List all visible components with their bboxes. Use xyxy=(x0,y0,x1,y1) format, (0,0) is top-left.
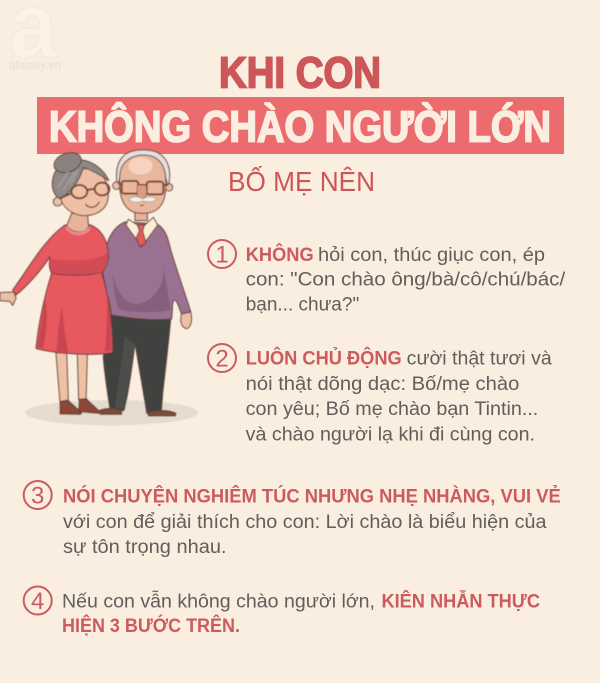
number 1 badge xyxy=(208,240,236,268)
item 2 text xyxy=(246,348,552,446)
item 4 text: KIÊN NHẪN THỰC xyxy=(382,590,540,612)
number 1 badge: 1 xyxy=(215,242,229,268)
number 2 badge: 2 xyxy=(215,346,229,372)
item 3 text: NÓI CHUYỆN NGHIÊM TÚC NHƯNG NHẸ NHÀNG, VUI VẺ xyxy=(63,486,561,508)
title: khi con: KHI CON xyxy=(219,48,381,98)
item 2 text: nói thật dõng dạc: Bố/mẹ chào xyxy=(246,374,519,395)
number 2 badge xyxy=(208,344,236,372)
item 1 text: bạn... chưa?" xyxy=(246,294,359,316)
item 4 text xyxy=(62,590,540,637)
item 1 text: KHÔNG xyxy=(246,244,314,266)
number 4 badge: 4 xyxy=(31,588,44,615)
item 3 text: sự tôn trọng nhau. xyxy=(63,537,226,558)
item 2 text: cười thật tươi và xyxy=(407,348,552,370)
number 3 badge: 3 xyxy=(31,482,44,510)
ground shadow xyxy=(25,400,198,425)
item 1 text xyxy=(246,244,566,316)
number 3 badge xyxy=(24,481,52,510)
item 2 text: con yêu; Bố mẹ chào bạn Tintin... xyxy=(246,399,538,420)
item 3 text: với con để giải thích cho con: Lời chào là biểu hiện của xyxy=(63,512,547,533)
item 1 xyxy=(208,240,566,316)
number 4 badge xyxy=(24,586,52,615)
man xyxy=(100,150,192,416)
logo: afamily watermark: afamily.vn xyxy=(9,58,61,72)
subtitle: BỐ MẸ NÊN xyxy=(228,165,375,197)
item 3 xyxy=(24,481,561,558)
woman xyxy=(0,213,113,414)
item 1 text: hỏi con, thúc giục con, ép xyxy=(318,245,545,266)
item 2 text: LUÔN CHỦ ĐỘNG xyxy=(246,348,402,370)
item 3 text xyxy=(63,486,561,558)
item 4 xyxy=(24,586,540,637)
item 2 xyxy=(208,344,552,446)
item 1 text: con: "Con chào ông/bà/cô/chú/bác/ xyxy=(246,270,566,290)
item 4 text: Nếu con vẫn không chào người lớn, xyxy=(62,590,375,612)
illustration: elderly couple xyxy=(0,149,198,425)
item 4 text: HIỆN 3 BƯỚC TRÊN. xyxy=(62,615,240,637)
item 2 text: và chào người lạ khi đi cùng con. xyxy=(246,425,535,446)
